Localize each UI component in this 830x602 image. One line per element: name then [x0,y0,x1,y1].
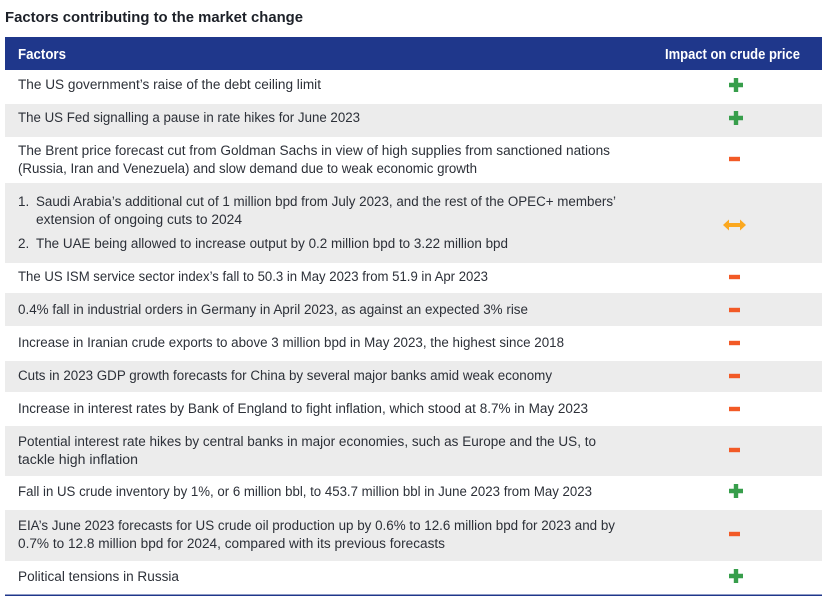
row 4: 2. [18,236,29,251]
row 10: tackle high inflation [18,452,138,467]
row 9: Increase in interest rates by Bank of England to fight inflation, which stood at 8.7% in May 2023 [18,401,588,416]
row 3: (Russia, Iran and Venezuela) and slow demand due to weak economic growth [18,161,477,176]
icon: minus [729,532,740,536]
row 4: Saudi Arabia’s additional cut of 1 million bpd from July 2023, and the rest of the OPEC+ members’ [36,194,616,209]
row 12: EIA’s June 2023 forecasts for US crude oil production up by 0.6% to 12.6 million bpd for 2023 and by [18,518,615,533]
icon: minus [729,448,740,452]
icon: minus [729,275,740,279]
icon: plus [729,569,743,583]
row 1: The US government’s raise of the debt ceiling limit [18,77,321,92]
icon: plus [729,78,743,92]
icon: plus [729,111,743,125]
row 4 [18,194,746,251]
row 12: 0.7% to 12.8 million bpd for 2024, compared with its previous forecasts [18,536,445,551]
row 3 [18,143,740,176]
table header: Impact on crude price [665,47,800,63]
row 5 [18,269,740,284]
row 2: The US Fed signalling a pause in rate hikes for June 2023 [18,110,360,125]
row 2 [18,110,743,125]
table header: Factors [18,47,66,63]
icon: minus [729,407,740,411]
row 10 [18,434,740,467]
title: Factors contributing to the market change [5,10,303,26]
row backgrounds [5,104,822,561]
row 5: The US ISM service sector index’s fall to 50.3 in May 2023 from 51.9 in Apr 2023 [18,269,488,284]
row 13 [18,569,743,584]
row 1 [18,77,743,92]
icon: minus [729,308,740,312]
icon: plus [729,484,743,498]
row 10: Potential interest rate hikes by central banks in major economies, such as Europe and the US, to [18,434,596,449]
row 7: Increase in Iranian crude exports to above 3 million bpd in May 2023, the highest since 2018 [18,335,564,350]
icon: minus [729,374,740,378]
table header [5,37,822,70]
row 8: Cuts in 2023 GDP growth forecasts for China by several major banks amid weak economy [18,368,552,383]
row 4: extension of ongoing cuts to 2024 [36,212,242,227]
icon: minus [729,157,740,161]
row 12 [18,518,740,551]
row 13: Political tensions in Russia [18,569,179,584]
row 3: The Brent price forecast cut from Goldman Sachs in view of high supplies from sanctioned nations [18,143,610,158]
row 11: Fall in US crude inventory by 1%, or 6 million bbl, to 453.7 million bbl in June 2023 from May 2023 [18,484,592,499]
row 6: 0.4% fall in industrial orders in Germany in April 2023, as against an expected 3% rise [18,302,528,317]
icon: two-way arrow [723,220,746,230]
row 4: 1. [18,194,29,209]
row 4: The UAE being allowed to increase output by 0.2 million bpd to 3.22 million bpd [36,236,508,251]
table bottom rule [5,594,822,596]
icon: minus [729,341,740,345]
